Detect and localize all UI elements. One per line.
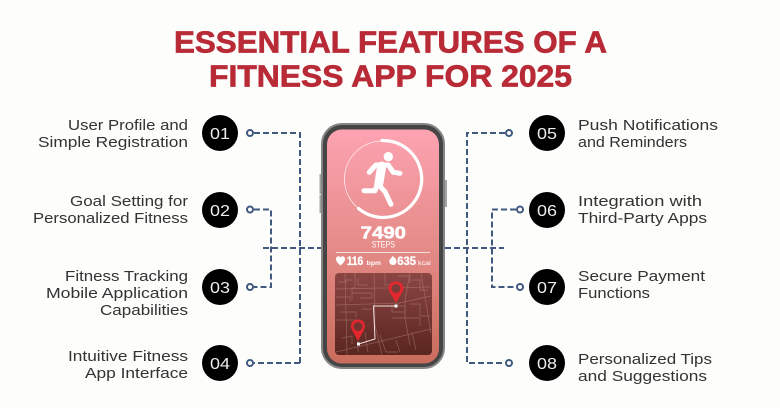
feature 03 bbox=[46, 268, 238, 319]
icon: runner bbox=[364, 152, 400, 204]
feature 01 bbox=[38, 115, 238, 151]
feature 02: 02 bbox=[210, 203, 230, 220]
calories stat: 635 bbox=[397, 256, 417, 268]
calories stat bbox=[389, 256, 431, 268]
feature 08: 08 bbox=[537, 356, 557, 373]
feature 04: Intuitive Fitness bbox=[68, 348, 188, 365]
feature 08 bbox=[529, 345, 712, 385]
phone bbox=[320, 124, 447, 368]
route endpoints bbox=[357, 304, 398, 346]
feature 07: 07 bbox=[537, 280, 557, 297]
feature 01: 01 bbox=[210, 126, 230, 143]
feature 06: 06 bbox=[537, 203, 557, 220]
map pin lower bbox=[351, 320, 365, 341]
feature 07: Secure Payment bbox=[578, 268, 706, 285]
connector lines: right bbox=[445, 130, 523, 366]
map route bbox=[358, 306, 396, 344]
feature 04: 04 bbox=[210, 356, 230, 373]
calories stat: kcal bbox=[418, 261, 431, 267]
divider bbox=[336, 251, 430, 254]
feature 06: Third-Party Apps bbox=[578, 210, 707, 227]
feature 02 bbox=[33, 192, 238, 228]
feature 07 bbox=[529, 268, 706, 305]
feature 06: Integration with bbox=[578, 193, 702, 210]
title bbox=[174, 25, 607, 94]
heart rate stat: bpm bbox=[367, 261, 381, 267]
feature 02: Personalized Fitness bbox=[33, 210, 188, 227]
step count: 7490 bbox=[361, 222, 406, 242]
feature 01: Simple Registration bbox=[38, 134, 188, 151]
phone frame bbox=[322, 124, 444, 368]
phone screen bbox=[327, 130, 439, 364]
progress ring bbox=[344, 140, 422, 217]
title: FITNESS APP FOR 2025 bbox=[209, 59, 572, 94]
feature 03: 03 bbox=[210, 280, 230, 297]
feature 04 bbox=[68, 345, 238, 382]
feature 05: Push Notifications bbox=[578, 117, 718, 134]
map streets bbox=[336, 273, 431, 355]
feature 08: Personalized Tips bbox=[578, 351, 712, 368]
feature 04: App Interface bbox=[85, 365, 188, 382]
feature 06 bbox=[529, 192, 707, 228]
heart rate stat bbox=[336, 256, 381, 268]
title: ESSENTIAL FEATURES OF A bbox=[174, 25, 607, 60]
feature 05 bbox=[529, 115, 718, 151]
map panel bbox=[335, 273, 432, 355]
feature 02: Goal Setting for bbox=[70, 193, 188, 210]
feature 03: Fitness Tracking bbox=[65, 268, 188, 285]
connector lines: left bbox=[247, 130, 322, 366]
feature 03: Mobile Application bbox=[46, 285, 188, 302]
feature 01: User Profile and bbox=[68, 117, 188, 134]
steps label: STEPS bbox=[372, 240, 395, 250]
feature 05: 05 bbox=[537, 126, 557, 143]
phone side buttons bbox=[320, 174, 447, 213]
feature 07: Functions bbox=[578, 285, 650, 302]
heart rate stat: 116 bbox=[347, 256, 363, 268]
map pin upper bbox=[388, 282, 404, 303]
feature 08: and Suggestions bbox=[578, 368, 707, 385]
feature 05: and Reminders bbox=[578, 134, 687, 151]
feature 03: Capabilities bbox=[100, 302, 188, 319]
